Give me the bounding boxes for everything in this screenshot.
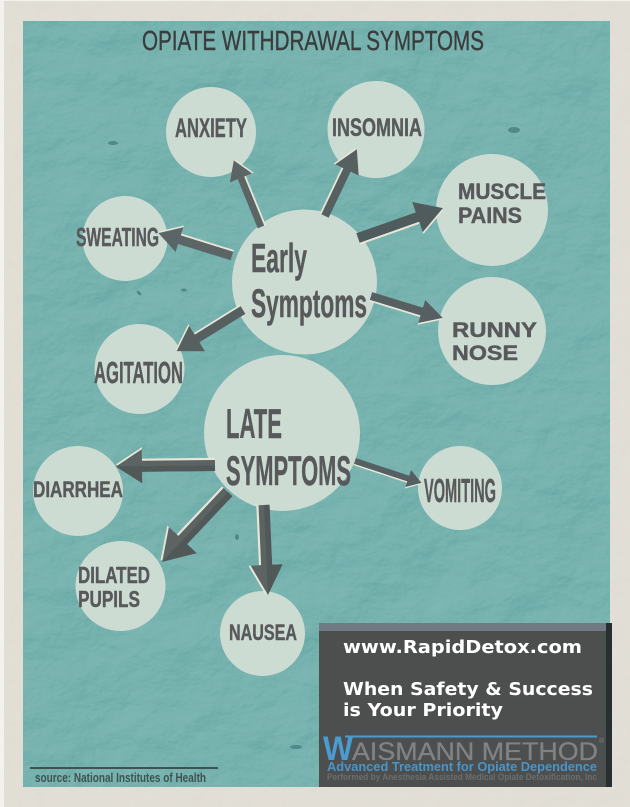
call to action box [319,623,612,787]
circle: anxiety [166,87,256,177]
logo: waismann method: W [323,730,354,768]
circle: nausea [220,591,305,676]
logo: waismann method: AISMANN METHOD [352,738,598,766]
circle: dilated pupils [76,541,166,631]
label: dilated pupils [78,562,150,612]
source note: source: National Institutes of Health [35,771,206,785]
label: dilated pupils: DILATED [78,562,150,588]
label: late symptoms: SYMPTOMS [226,447,351,494]
circle: late symptoms [204,355,360,511]
label: runny nose: NOSE [452,342,518,365]
label: nausea: NAUSEA [229,620,297,645]
label: late symptoms: LATE [226,400,282,447]
circle: vomiting [418,446,502,530]
circle: runny nose [438,277,546,385]
label: runny nose [452,319,537,365]
tagline: When Safety & Success [343,679,593,700]
arrow: early to muscle pains [353,193,449,255]
label: agitation: AGITATION [94,355,183,390]
label: anxiety: ANXIETY [175,113,247,143]
label: dilated pupils: PUPILS [78,586,140,612]
circle: diarrhea [33,446,123,536]
label: muscle pains [458,179,546,228]
arrow: early to runny nose [367,285,446,331]
circle: sweating [82,196,168,281]
arrow: late to diarrhea [116,446,215,484]
arrow: early to insomnia [312,143,369,222]
label: late symptoms [226,400,351,494]
label: muscle pains: PAINS [458,203,522,228]
label: muscle pains: MUSCLE [458,179,546,204]
arrow: early to agitation [168,296,251,364]
text: VOMITING [424,472,496,509]
tagline: is Your Priority [343,700,503,721]
circle: insomnia [328,81,424,178]
circle: muscle pains [436,154,548,266]
label: insomnia: INSOMNIA [332,114,422,142]
website url: www.RapidDetox.com [343,637,582,658]
logo: waismann method: Advanced Treatment for Opiate Dependence [327,759,597,774]
circle: agitation [94,324,184,414]
arrow: early to sweating [155,219,236,268]
label: runny nose: RUNNY [452,319,537,342]
label: early symptoms [251,235,367,326]
arrow: late to nausea [246,504,284,596]
circle: early symptoms [232,210,377,354]
logo: waismann method: ® [599,737,605,745]
label: sweating: SWEATING [76,222,159,252]
arrow: late to vomiting [352,452,424,493]
label: early symptoms: Early [251,235,307,281]
logo: waismann method: Performed by Anesthesia Assisted Medical Opiate Detoxification, Inc [327,772,597,782]
arrow: early to anxiety [223,155,274,232]
logo: waismann method [323,730,605,782]
tagline [343,679,593,721]
title: OPIATE WITHDRAWAL SYMPTOMS [142,25,484,56]
label: early symptoms: Symptoms [251,282,367,326]
arrow: late to dilated pupils [147,477,242,575]
label: diarrhea: DIARRHEA [33,477,123,502]
